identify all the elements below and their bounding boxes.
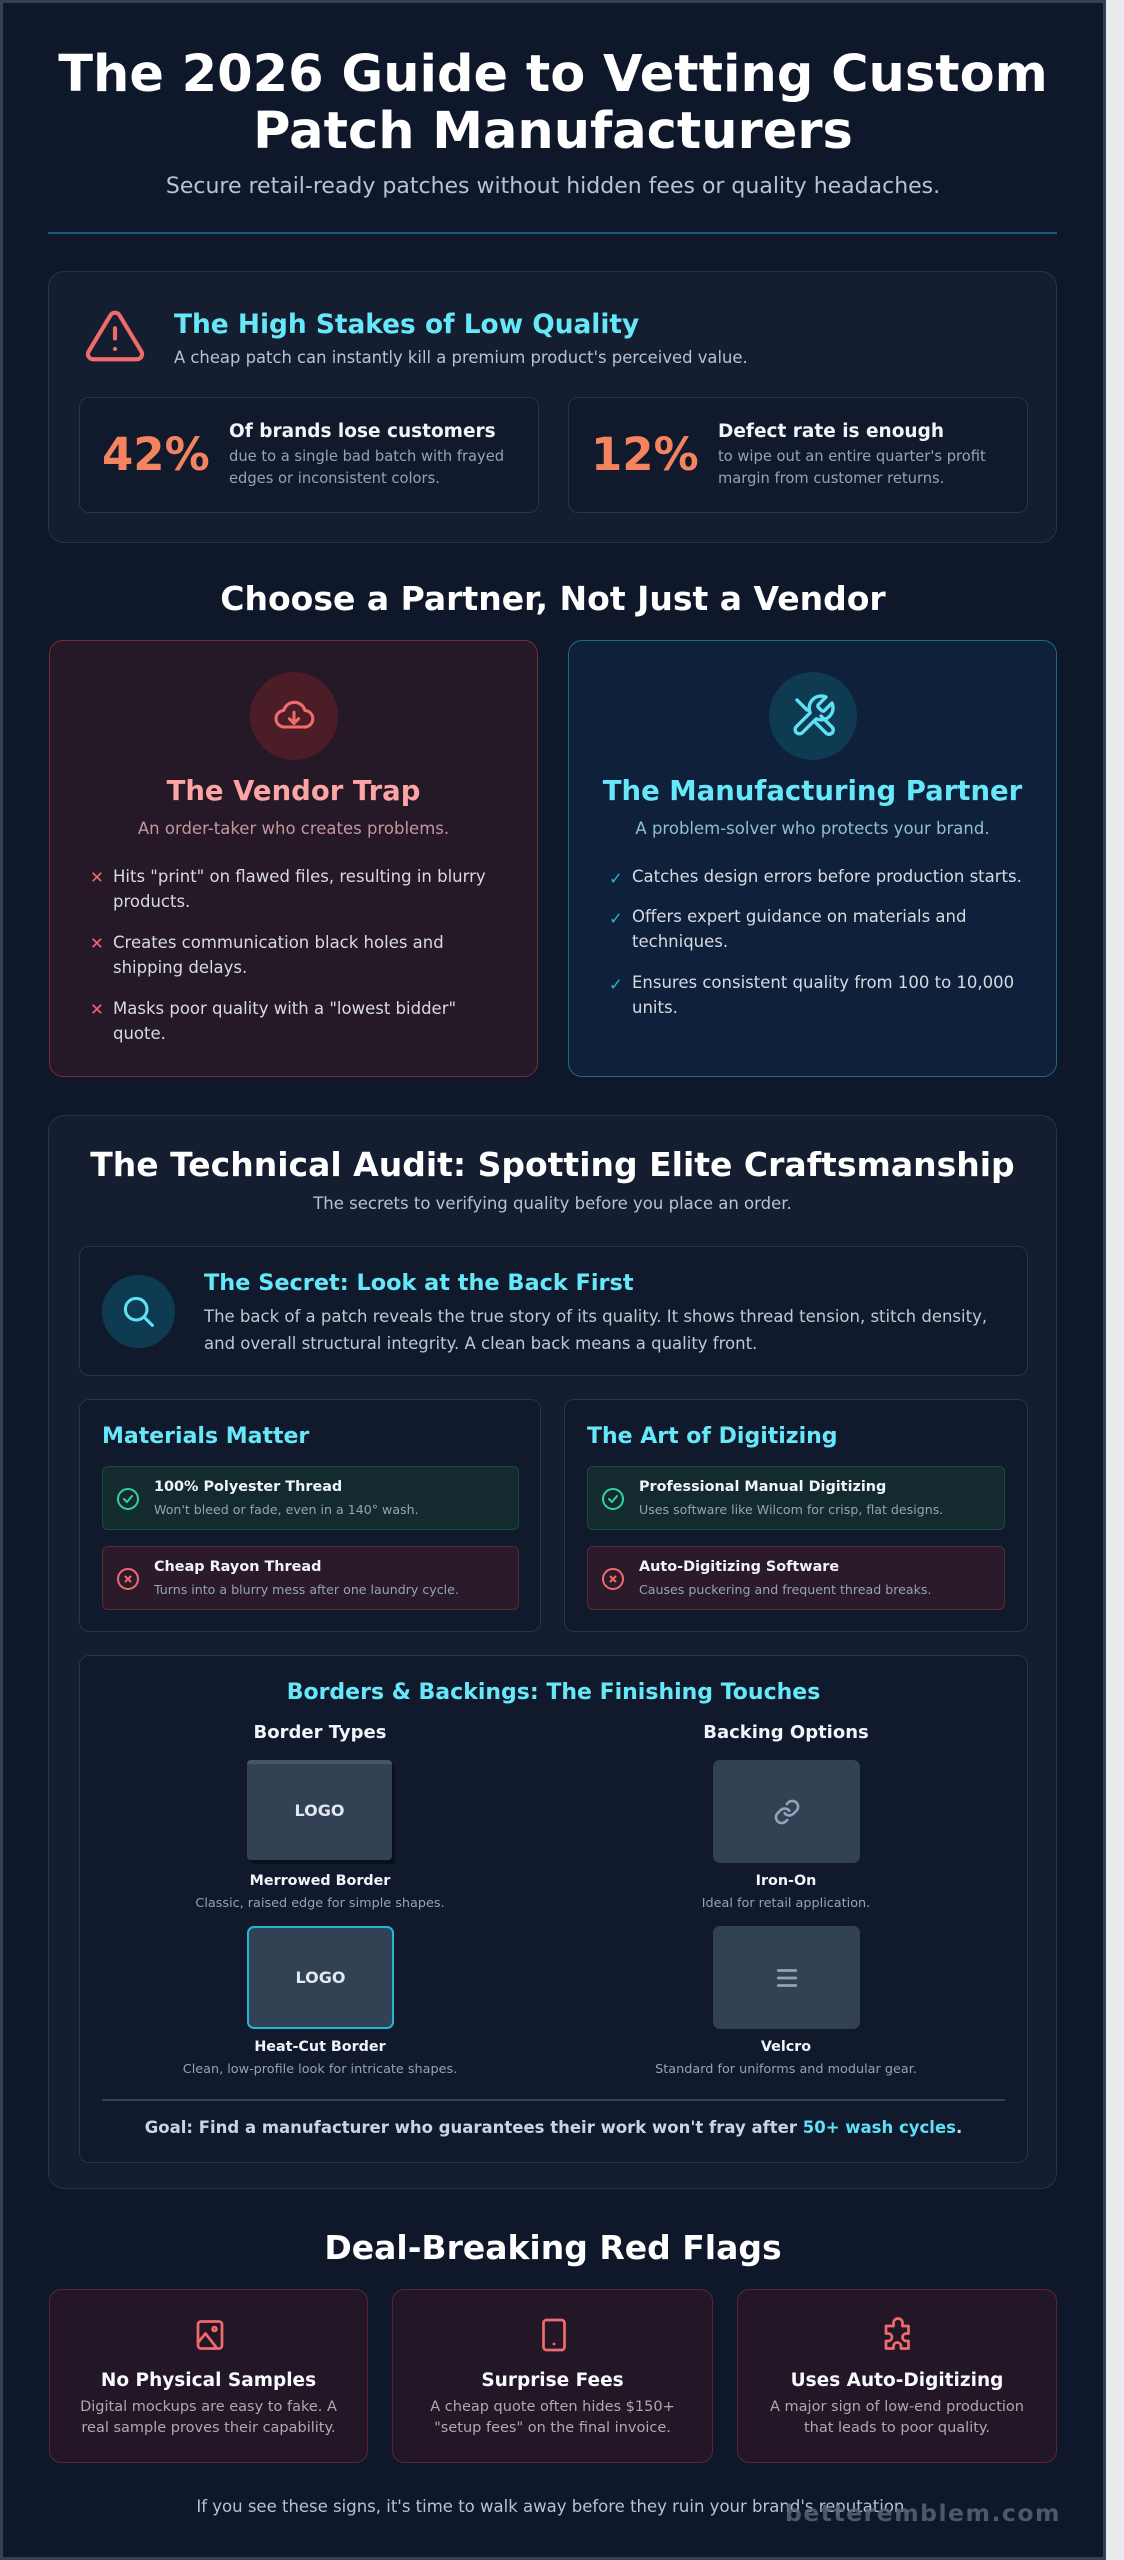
panel: vendor trap: Hits "print" on flawed files, resulting in blurry products. xyxy=(113,867,486,911)
panel: manufacturing partner: ✓ xyxy=(609,909,623,928)
column: border types: Heat-Cut Border xyxy=(254,2039,386,2055)
box: art of digitizing xyxy=(564,1399,1028,1632)
stat 42%: edges or inconsistent colors. xyxy=(229,470,440,487)
list: ✕ xyxy=(90,868,104,887)
panel: manufacturing partner: Offers expert guidance on materials and techniques. xyxy=(632,907,966,951)
text xyxy=(204,1307,987,1353)
column: backing options: Ideal for retail application. xyxy=(702,1896,870,1911)
stat 12%: margin from customer returns. xyxy=(718,470,944,487)
item: auto xyxy=(587,1546,1005,1610)
column: backing options: Standard for uniforms and modular gear. xyxy=(655,2062,917,2077)
goal text: Goal: Find a manufacturer who guarantees their work won't fray after 50+ wash cycles. xyxy=(145,2118,962,2137)
icon: cloud download xyxy=(250,672,338,760)
heading: red flags: Deal-Breaking Red Flags xyxy=(324,2228,782,2267)
column: backing options: Iron-On xyxy=(756,1873,816,1889)
subtitle: The secrets to verifying quality before you place an order. xyxy=(313,1194,792,1213)
title xyxy=(58,45,1048,161)
panel: vendor trap xyxy=(49,640,538,1077)
item: rayon xyxy=(102,1546,519,1610)
title: The Manufacturing Partner xyxy=(603,775,1022,807)
column: border types: Border Types xyxy=(254,1722,386,1743)
subtitle: A problem-solver who protects your brand. xyxy=(635,819,990,838)
item: manual: Uses software like Wilcom for crisp, flat designs. xyxy=(639,1502,943,1517)
card: no physical samples: No Physical Samples xyxy=(101,2370,316,2391)
text: and overall structural integrity. A clean back means a quality front. xyxy=(204,1334,757,1353)
column: backing options: Backing Options xyxy=(703,1722,869,1743)
panel: vendor trap: Masks poor quality with a "lowest bidder" quote. xyxy=(113,999,456,1043)
column: border types: Classic, raised edge for simple shapes. xyxy=(195,1896,445,1911)
title: Patch Manufacturers xyxy=(253,102,853,161)
stat 12%: to wipe out an entire quarter's profit xyxy=(718,448,986,465)
box: materials matter xyxy=(79,1399,541,1632)
card: surprise fees: "setup fees" on the final invoice. xyxy=(434,2420,671,2436)
column: backing options xyxy=(655,1722,917,2077)
item: manual xyxy=(587,1466,1005,1530)
item: rayon: Turns into a blurry mess after one laundry cycle. xyxy=(154,1582,459,1597)
heading: choose a partner: Choose a Partner, Not Just a Vendor xyxy=(220,579,886,618)
card: no physical samples: real sample proves their capability. xyxy=(81,2420,336,2436)
item: rayon: Cheap Rayon Thread xyxy=(154,1559,321,1575)
item: polyester xyxy=(102,1466,519,1530)
heading: Borders & Backings: The Finishing Touches xyxy=(287,1680,820,1705)
card: surprise fees xyxy=(392,2289,713,2463)
column: border types xyxy=(183,1722,457,2077)
panel: manufacturing partner: ✓ xyxy=(609,975,623,994)
icon: puzzle xyxy=(884,2317,910,2350)
box: secret xyxy=(79,1246,1028,1376)
stat 12%: Defect rate is enough xyxy=(718,421,944,442)
subtitle: An order-taker who creates problems. xyxy=(138,819,449,838)
heading: The Art of Digitizing xyxy=(587,1424,838,1449)
column: border types: Clean, low-profile look for intricate shapes. xyxy=(183,2062,457,2077)
stat 12% xyxy=(568,397,1028,513)
item: manual: Professional Manual Digitizing xyxy=(639,1479,886,1495)
icon: warning xyxy=(86,310,144,362)
card: no physical samples xyxy=(49,2289,368,2463)
item: auto: Causes puckering and frequent thread breaks. xyxy=(639,1582,931,1597)
title: The Vendor Trap xyxy=(167,775,420,807)
heading: The Technical Audit: Spotting Elite Craftsmanship xyxy=(90,1145,1015,1184)
icon: velcro xyxy=(713,1926,860,2029)
item: polyester: Won't bleed or fade, even in a 140° wash. xyxy=(154,1502,419,1517)
watermark: betteremblem.com xyxy=(785,2499,1061,2527)
panel: vendor trap: ✕ xyxy=(90,934,104,953)
text: The back of a patch reveals the true story of its quality. It shows thread tension, stitch density, xyxy=(204,1307,987,1326)
stat 42%: due to a single bad batch with frayed xyxy=(229,448,504,465)
icon: tablet xyxy=(542,2318,566,2352)
card: auto-digitizing: that leads to poor quality. xyxy=(804,2420,990,2436)
subtitle: Secure retail-ready patches without hidden fees or quality headaches. xyxy=(166,174,940,199)
heading: Materials Matter xyxy=(102,1424,309,1449)
panel: manufacturing partner: Ensures consistent quality from 100 to 10,000 units. xyxy=(632,973,1014,1017)
panel: manufacturing partner xyxy=(568,640,1057,1077)
patch: merrowed xyxy=(247,1760,392,1860)
stat 42%: Of brands lose customers xyxy=(229,421,496,442)
icon: iron-on link xyxy=(713,1760,860,1863)
icon: tools xyxy=(769,672,857,760)
panel: manufacturing partner: Catches design errors before production starts. xyxy=(632,867,1022,886)
stat 12%: 12% xyxy=(591,428,699,481)
card: surprise fees: Surprise Fees xyxy=(481,2370,624,2391)
card: no physical samples: Digital mockups are easy to fake. A xyxy=(80,2399,337,2415)
icon: image xyxy=(196,2320,224,2350)
text: A cheap patch can instantly kill a premium product's perceived value. xyxy=(174,348,748,367)
patch: merrowed: LOGO xyxy=(295,1801,344,1820)
panel: high stakes xyxy=(48,271,1057,543)
footer text: If you see these signs, it's time to walk away before they ruin your brand's reputation. xyxy=(196,2497,910,2516)
box: borders & backings xyxy=(79,1655,1028,2163)
card: auto-digitizing xyxy=(737,2289,1057,2463)
patch: heat-cut xyxy=(247,1926,394,2029)
panel: vendor trap: Creates communication black holes and shipping delays. xyxy=(113,933,444,977)
item: auto: Auto-Digitizing Software xyxy=(639,1559,839,1575)
heading: The High Stakes of Low Quality xyxy=(174,309,639,340)
panel: technical audit xyxy=(48,1115,1057,2189)
column: border types: Merrowed Border xyxy=(250,1873,390,1889)
icon: magnifier xyxy=(102,1275,175,1348)
patch: heat-cut: LOGO xyxy=(296,1968,345,1987)
stat 42%: 42% xyxy=(102,428,210,481)
card: auto-digitizing: A major sign of low-end production xyxy=(770,2399,1024,2415)
title: The 2026 Guide to Vetting Custom xyxy=(58,45,1048,104)
panel: vendor trap: ✕ xyxy=(90,1000,104,1019)
card: auto-digitizing: Uses Auto-Digitizing xyxy=(791,2370,1003,2391)
item: polyester: 100% Polyester Thread xyxy=(154,1479,342,1495)
list: ✓ xyxy=(609,869,623,888)
heading: The Secret: Look at the Back First xyxy=(204,1270,634,1296)
card: surprise fees: A cheap quote often hides $150+ xyxy=(430,2399,675,2415)
column: backing options: Velcro xyxy=(761,2039,811,2055)
stat 42% xyxy=(79,397,539,513)
